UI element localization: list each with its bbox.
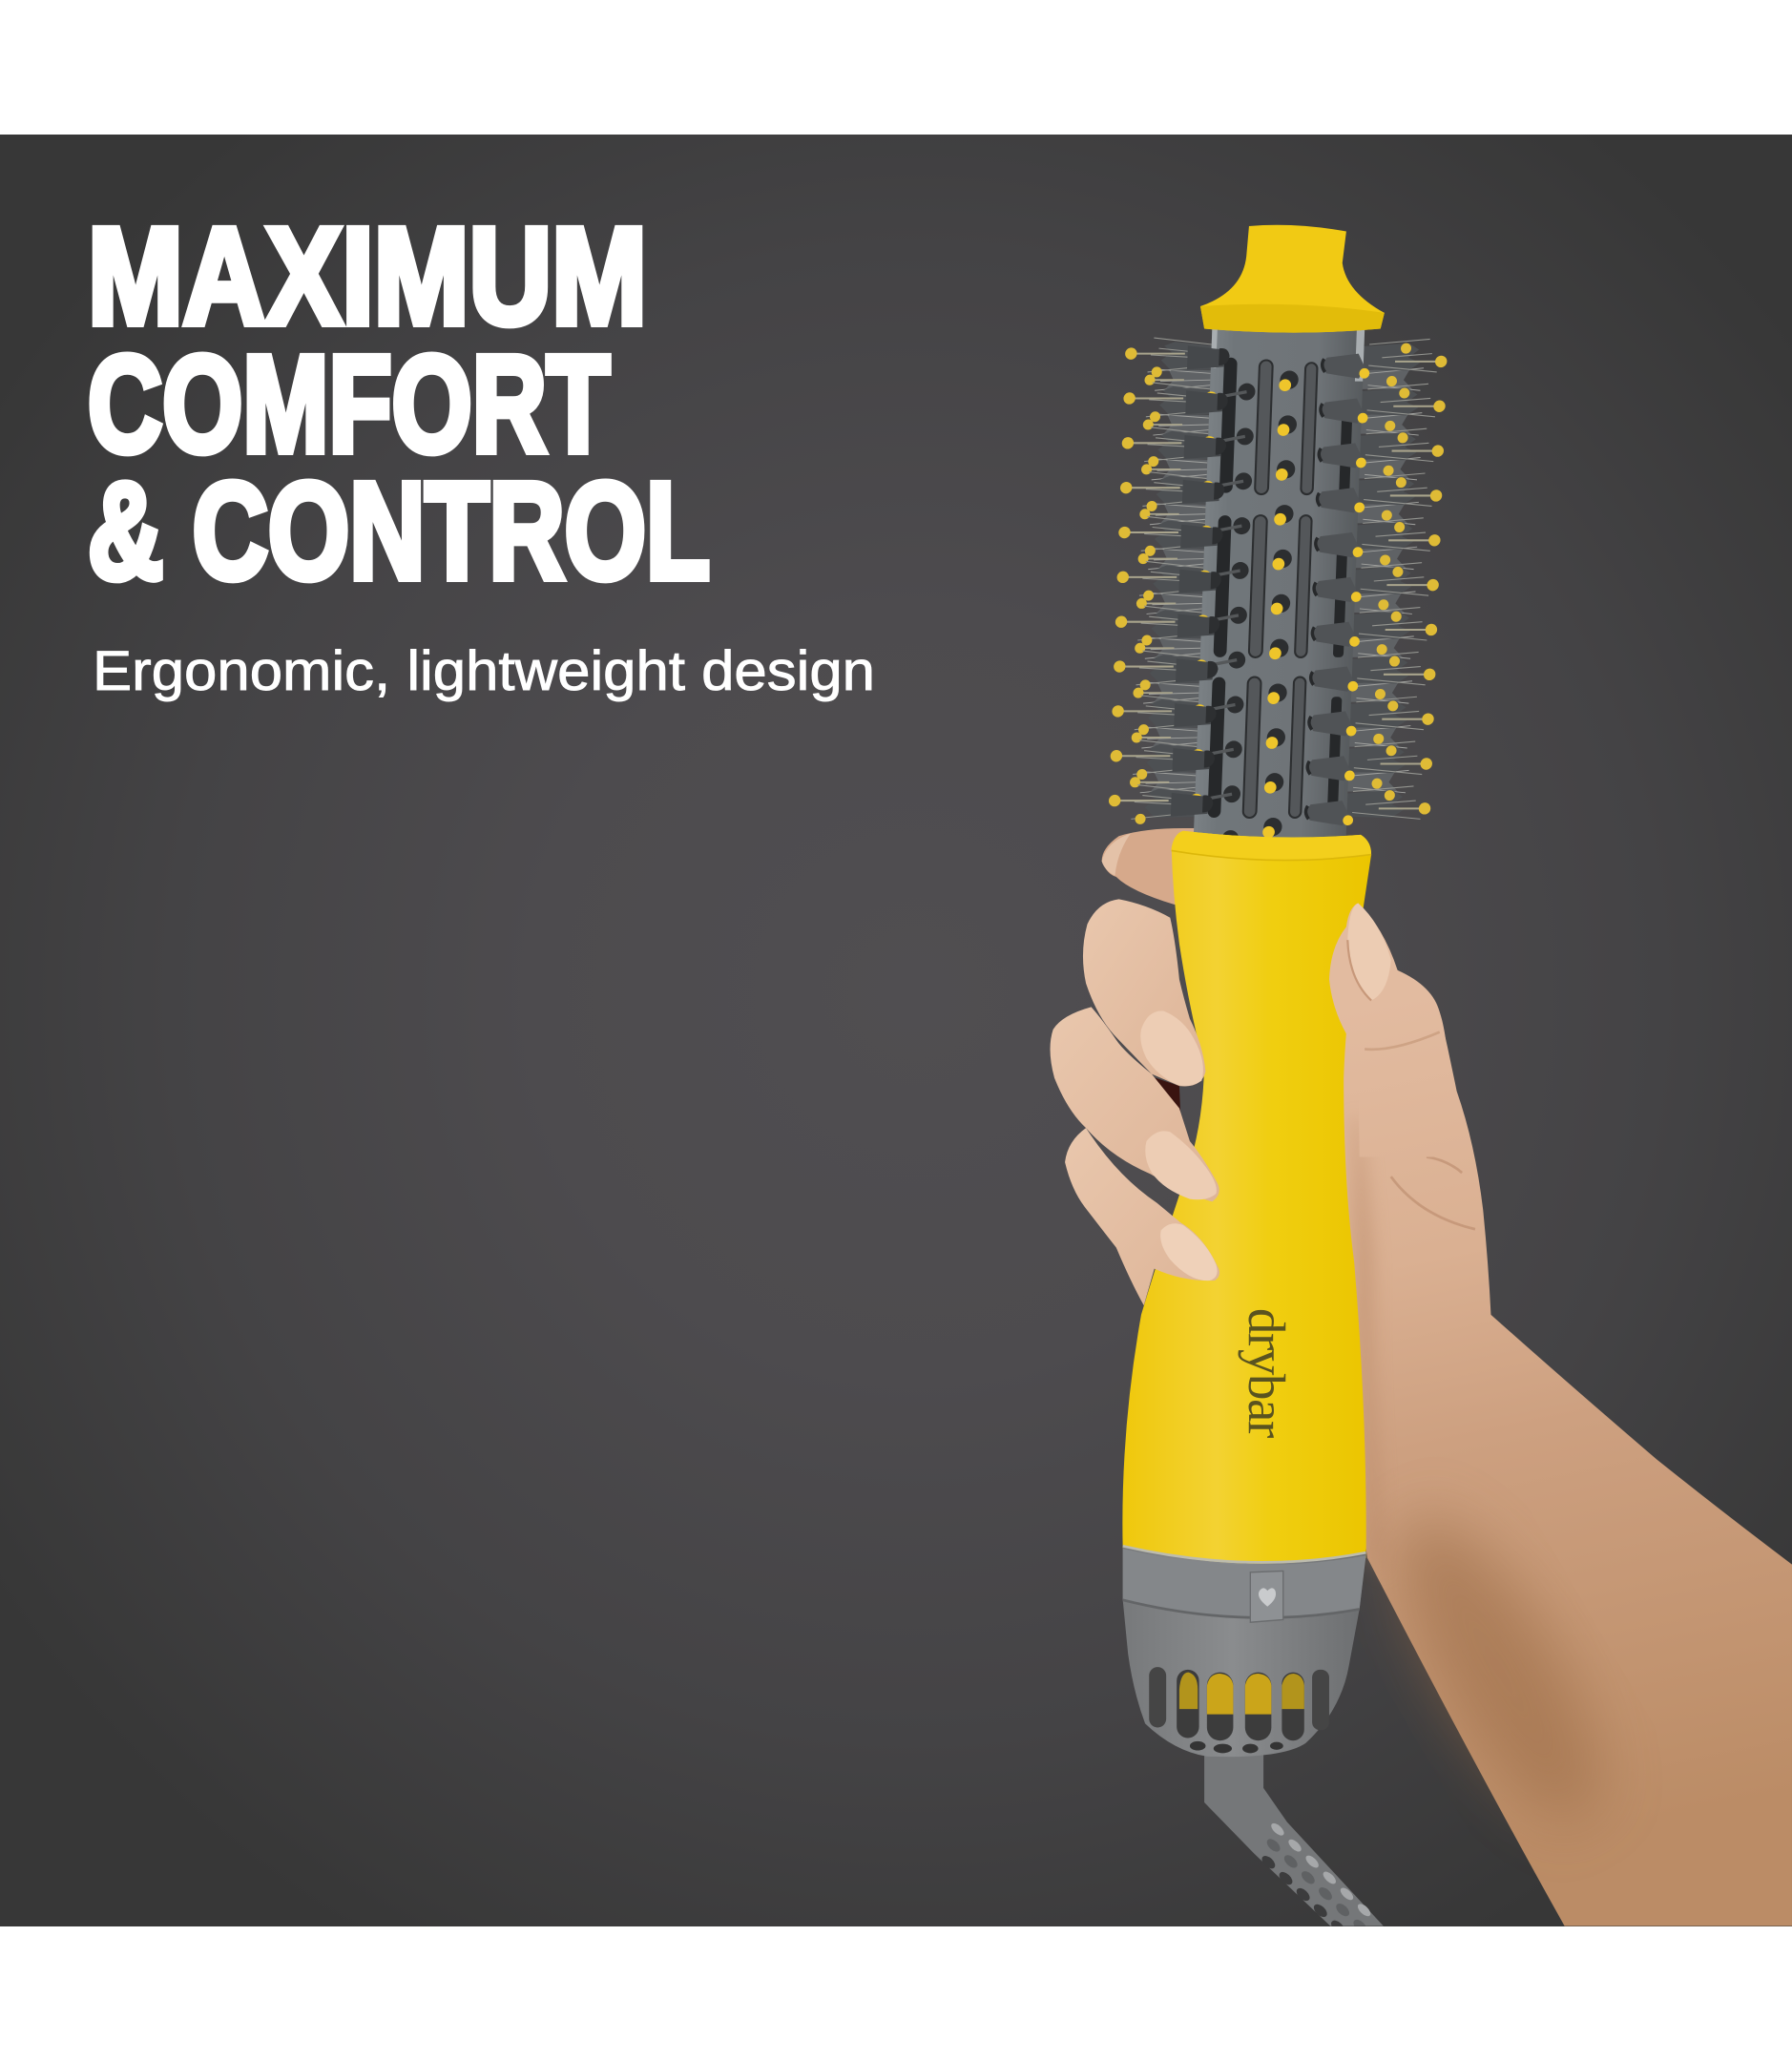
thumb with nail: [1329, 904, 1448, 1156]
title: [88, 199, 875, 702]
forearm and palm: [1315, 970, 1792, 1926]
title: & CONTROL: [88, 454, 710, 608]
brush end cap: [1200, 225, 1385, 333]
illustration: hand holding hair dryer brush: [1050, 225, 1792, 1926]
handle: gray base with air intake: [1123, 1546, 1366, 1757]
air intake vents: [1149, 1667, 1329, 1753]
title: MAXIMUM: [88, 199, 647, 353]
title: COMFORT: [88, 327, 610, 481]
dark gap between fingers: [1155, 1078, 1180, 1111]
clip tab with heart: [1250, 1571, 1283, 1622]
brand logo: drybar: [1238, 1308, 1296, 1438]
brush barrel with vents and front bristles: [1169, 328, 1371, 852]
middle finger with nail: [1083, 899, 1205, 1086]
brush back bristles: [1108, 338, 1448, 824]
index finger behind handle: [1102, 828, 1197, 907]
subtitle: Ergonomic, lightweight design: [93, 640, 875, 702]
cord neck with perforations: [1204, 1755, 1384, 1926]
pinky finger with nail: [1065, 1128, 1219, 1305]
handle: yellow body: [1122, 831, 1371, 1566]
ring finger with nail: [1051, 1007, 1219, 1201]
